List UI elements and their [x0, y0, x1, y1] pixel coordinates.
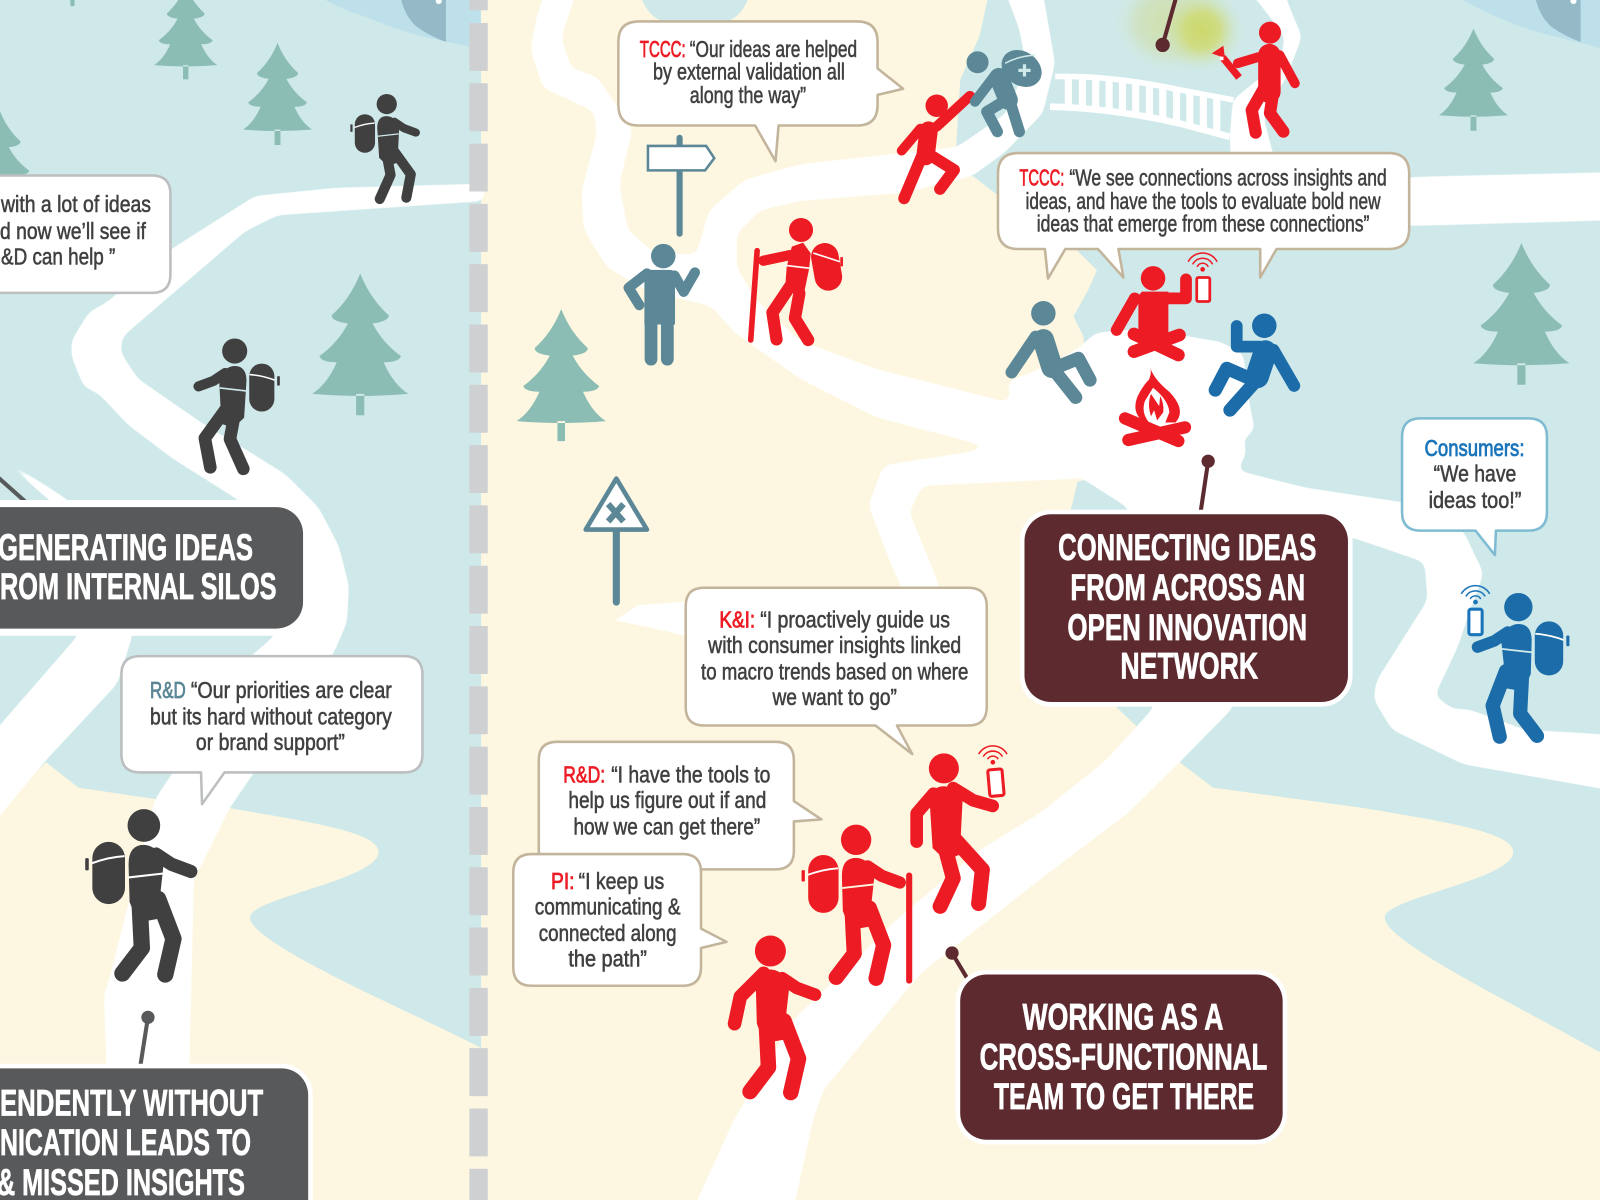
callout: TCCC external validation: along the way” — [690, 82, 806, 108]
callout: R&D tools: “I have the tools to — [611, 762, 770, 788]
heading box: cross-functional team: CROSS-FUNCTIONNAL — [980, 1036, 1267, 1077]
heading box: working independently — [0, 1068, 308, 1200]
callout: TCCC external validation: TCCC: — [640, 36, 686, 62]
campfire icon — [1125, 367, 1185, 441]
pin: grey marker to silos box — [0, 476, 33, 508]
callout: TCCC external validation: by external validation all — [653, 59, 845, 85]
callout: K&I: to macro trends based on where — [701, 659, 968, 685]
red hiker with backpack and stick — [802, 825, 909, 981]
callout: PI: communicating & — [535, 893, 681, 919]
teal hiker waving at signpost — [629, 244, 695, 359]
callout: consumers — [1402, 418, 1547, 555]
mountain peaks in the corners — [316, 0, 1600, 49]
red figure sitting with phone — [1117, 253, 1217, 355]
callout: PI — [513, 854, 727, 986]
heading box: cross-functional team — [960, 974, 1283, 1140]
callout: consumers: Consumers: — [1424, 435, 1524, 461]
blue figure sitting at campfire — [1215, 313, 1294, 410]
trail pin top: flashlight marker — [1156, 0, 1177, 52]
callout: TCCC external validation — [618, 21, 903, 161]
direction signpost — [648, 138, 714, 234]
heading box: connecting ideas: FROM ACROSS AN — [1070, 567, 1305, 608]
yellow glow of the flashlight — [1110, 0, 1247, 76]
callout: TCCC connections: “We see connections across insights and — [1069, 165, 1387, 191]
heading box: generating ideas from internal silos — [0, 507, 303, 629]
callout: R&D tools — [539, 742, 821, 869]
callout: PI: PI: — [551, 868, 574, 894]
heading box: connecting ideas: CONNECTING IDEAS — [1058, 527, 1316, 568]
callout: K&I: we want to go” — [772, 684, 897, 710]
blue consumer hiker with phone — [1461, 586, 1569, 737]
dark hiker bottom — [85, 809, 191, 974]
red hiker with walking stick — [751, 218, 844, 340]
callout: TCCC connections: ideas that emerge from these connections” — [1037, 211, 1369, 237]
callout: PI: “I keep us — [579, 868, 664, 894]
callout: partial dark bubble top left: d now we’ll see if — [0, 218, 146, 244]
callout: partial dark bubble top left: &D can help ” — [1, 243, 115, 269]
teal figure sitting at campfire — [1012, 301, 1090, 397]
callout: R&D priorities: R&D — [150, 677, 186, 703]
pointed end of the side trail — [615, 602, 684, 635]
callout: R&D priorities — [121, 656, 422, 804]
callout: K&I: K&I: — [719, 607, 755, 633]
dark hiker middle — [199, 338, 280, 469]
trees — [0, 0, 1569, 441]
callout: consumers: “We have — [1434, 461, 1516, 487]
red walker with phone — [917, 746, 1007, 906]
callout: TCCC connections: TCCC: — [1019, 165, 1064, 191]
callout: R&D tools: help us figure out if and — [568, 787, 766, 813]
callout: partial dark bubble top left: with a lot of ideas — [0, 191, 151, 217]
heading box: connecting ideas: OPEN INNOVATION — [1067, 607, 1307, 648]
small lake at top — [640, 0, 750, 20]
pin: brown marker to connecting box — [1200, 455, 1215, 516]
heading box: generating ideas from internal silos: ROM INTERNAL SILOS — [0, 566, 277, 607]
dashed divider between panels — [470, 0, 488, 1200]
callout: R&D priorities: “Our priorities are clear — [191, 677, 392, 703]
red walker at the rear — [735, 936, 815, 1093]
heading box: cross-functional team: WORKING AS A — [1022, 997, 1223, 1038]
callout: R&D priorities: or brand support” — [196, 729, 345, 755]
heading box: cross-functional team: TEAM TO GET THERE — [994, 1076, 1254, 1117]
callout: K&I — [686, 588, 987, 754]
dark hiker top — [350, 94, 416, 199]
callout: R&D priorities: but its hard without category — [150, 703, 392, 729]
heading box: connecting ideas: NETWORK — [1120, 646, 1259, 687]
callout: K&I: “I proactively guide us — [760, 607, 950, 633]
callout: TCCC connections: ideas, and have the tools to evaluate bold new — [1026, 188, 1381, 214]
callout: K&I: with consumer insights linked — [707, 632, 961, 658]
heading box: working independently: NICATION LEADS TO — [0, 1122, 251, 1163]
callout: consumers: ideas too!” — [1429, 487, 1521, 513]
heading box: working independently: ENDENTLY WITHOUT — [0, 1082, 264, 1123]
pin: brown marker to team box — [945, 946, 970, 984]
teal hiker with first aid backpack — [967, 42, 1049, 132]
red hiker climbing — [902, 94, 970, 198]
callout: R&D tools: R&D: — [563, 762, 605, 788]
pin: grey marker to lower box — [140, 1011, 155, 1069]
red hiker with flashlight — [1212, 22, 1295, 133]
callout: PI: connected along — [539, 920, 677, 946]
callout: PI: the path” — [568, 945, 647, 971]
callout: R&D tools: how we can get there” — [573, 814, 760, 840]
callout: partial dark bubble top left — [0, 176, 170, 293]
footbridge — [1050, 76, 1234, 137]
heading box: generating ideas from internal silos: GENERATING IDEAS — [0, 527, 253, 568]
callout: TCCC external validation: “Our ideas are helped — [690, 36, 857, 62]
crossing warning sign — [586, 479, 647, 602]
callout: TCCC connections — [998, 153, 1409, 279]
heading box: connecting ideas — [1024, 514, 1348, 702]
